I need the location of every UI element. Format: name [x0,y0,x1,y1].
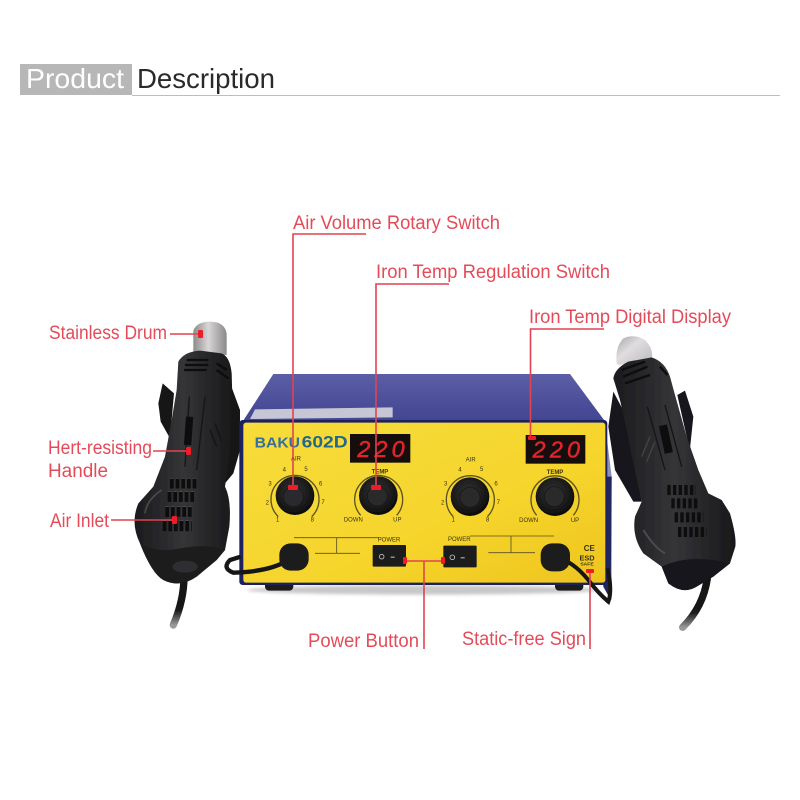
knob: left air: 4 [283,468,287,474]
power cable left [227,543,309,573]
feet [265,581,583,591]
logo [255,433,348,452]
knob: left air: 3 [268,482,272,488]
callout: Air Volume Rotary Switch [288,213,500,490]
callout: Iron Temp Digital Display: Iron Temp Digital Display [529,307,731,328]
title: Product Description: Product [26,63,124,94]
yellow front panel [243,423,605,583]
power switches [373,537,477,567]
callout: Iron Temp Regulation Switch: Iron Temp Regulation Switch [376,262,610,283]
knob: right air: 4 [458,468,462,474]
photo: left hot air gun [135,322,240,625]
schematic lines [294,536,554,553]
knob: left air: 5 [304,467,308,473]
title: Product Description: Description [137,63,275,94]
knob: left air: 1 [276,517,280,523]
callout: Stainless Drum: Stainless Drum [49,323,167,344]
knob: left temp [344,469,403,523]
knob: right air: 7 [497,500,501,506]
knob: right air: 6 [494,482,498,488]
shadow under station [247,585,600,595]
gun cable [173,577,184,625]
callout: Iron Temp Digital Display [528,307,731,440]
knob: right temp: TEMP [547,470,563,476]
knob: right air: AIR [466,457,476,463]
knob: right air [441,457,501,523]
knob: right air: 5 [480,467,484,473]
gun cable [683,578,707,627]
callout: Static-free Sign [462,569,594,650]
certification marks: ESD [579,554,595,563]
knob: right temp: UP [571,518,579,524]
callout: Hert-resisting Handle [48,438,191,482]
callout: Air Inlet [50,511,177,532]
logo: BAKU [255,435,300,451]
callout: Static-free Sign: Static-free Sign [462,629,586,650]
knob: left temp: UP [393,517,401,523]
knob: left air [266,457,325,523]
callout: Hert-resisting Handle: Hert-resisting [48,438,152,459]
knob: left air: 2 [266,501,270,507]
knob: right air: 3 [444,482,448,488]
display: left 220: 220 [356,436,405,462]
knob: left air: 6 [319,482,323,488]
power switches: POWER [448,537,471,543]
callout: Air Inlet: Air Inlet [50,511,110,532]
knob: left temp: DOWN [344,517,363,523]
photo: right hot air gun [608,336,736,627]
power switches: POWER [378,538,401,544]
callout: Iron Temp Regulation Switch [371,262,610,490]
title: Product Description [20,63,780,96]
certification marks [579,544,596,568]
power cable right [541,543,610,602]
knob: right temp: DOWN [519,518,538,524]
knob: right temp [519,470,579,524]
display: right 220: 220 [532,436,580,462]
certification marks: CE [584,544,596,553]
sticker [250,407,393,419]
certification marks: SAFE [580,562,594,568]
callout: Power Button: Power Button [308,631,419,652]
knob: left air: 8 [311,517,315,523]
callout: Air Volume Rotary Switch: Air Volume Rotary Switch [293,213,500,234]
logo: 602D [302,433,348,452]
front frame [239,420,607,585]
knob: left air: AIR [291,457,302,463]
knob: right air: 1 [452,517,456,523]
knob: left air: 7 [321,500,325,506]
callout: Hert-resisting Handle: Handle [48,461,108,482]
knob: right air: 2 [441,501,445,507]
knob: left temp: TEMP [372,469,388,475]
station top cover [242,374,606,423]
knob: right air: 8 [486,517,490,523]
photo: soldering station [227,374,612,602]
right side reflection [603,423,612,600]
callout: Power Button [308,557,445,652]
